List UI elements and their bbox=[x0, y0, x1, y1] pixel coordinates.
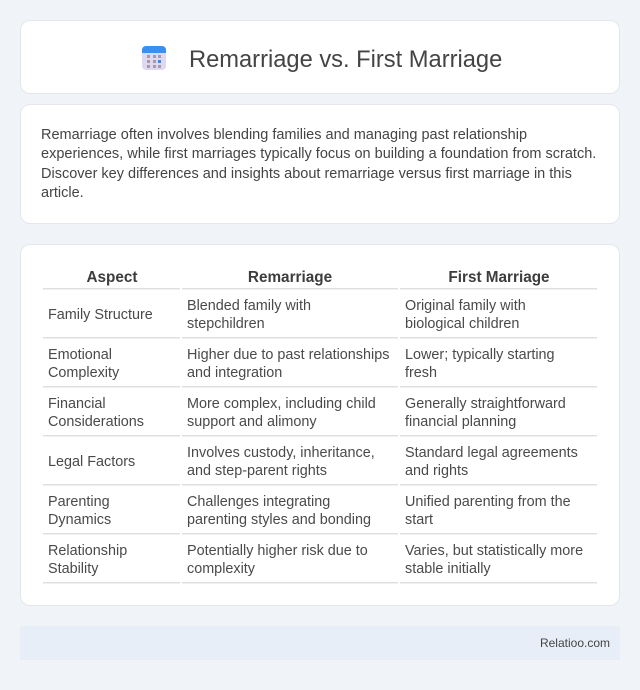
intro paragraph: Remarriage often involves blending families and managing past relationship bbox=[41, 127, 527, 143]
table header: Remarriage bbox=[248, 269, 332, 286]
row: family structure: Blended family with bbox=[187, 298, 311, 314]
row: parenting dynamics: Challenges integrating bbox=[187, 494, 330, 510]
row: legal factors: and step-parent rights bbox=[187, 463, 327, 479]
row: financial considerations: financial planning bbox=[405, 414, 516, 430]
row: emotional complexity: and integration bbox=[187, 365, 282, 381]
row: emotional complexity bbox=[43, 337, 597, 381]
footer bar bbox=[20, 626, 620, 660]
row: family structure: stepchildren bbox=[187, 316, 265, 332]
row: financial considerations: support and alimony bbox=[187, 414, 317, 430]
row: family structure: Family Structure bbox=[48, 307, 153, 323]
footer brand text: Relatioo.com bbox=[540, 636, 610, 650]
row: legal factors: Legal Factors bbox=[48, 454, 135, 470]
title: Remarriage vs. First Marriage bbox=[189, 47, 502, 73]
row: financial considerations bbox=[43, 386, 597, 430]
row: family structure bbox=[43, 288, 597, 332]
row: parenting dynamics: Parenting bbox=[48, 494, 110, 510]
row: emotional complexity: Emotional bbox=[48, 347, 112, 363]
row: relationship stability: Stability bbox=[48, 561, 98, 577]
row: legal factors bbox=[43, 435, 597, 479]
row: financial considerations: More complex, including child bbox=[187, 396, 376, 412]
row: financial considerations: Financial bbox=[48, 396, 106, 412]
table header bbox=[86, 269, 550, 286]
row: legal factors: Standard legal agreements bbox=[405, 445, 578, 461]
intro paragraph: Discover key differences and insights about remarriage versus first marriage in this bbox=[41, 166, 572, 182]
intro paragraph bbox=[41, 127, 596, 201]
row: family structure: biological children bbox=[405, 316, 519, 332]
row: relationship stability: Varies, but statistically more bbox=[405, 543, 583, 559]
row: relationship stability: stable initially bbox=[405, 561, 491, 577]
row: relationship stability: Potentially higher risk due to bbox=[187, 543, 368, 559]
table header: Aspect bbox=[86, 269, 138, 286]
panel: intro text bbox=[20, 104, 620, 224]
table header: First Marriage bbox=[448, 269, 550, 286]
panel: comparison table bbox=[20, 244, 620, 606]
row: relationship stability: complexity bbox=[187, 561, 255, 577]
row: financial considerations: Considerations bbox=[48, 414, 144, 430]
row: parenting dynamics: Dynamics bbox=[48, 512, 111, 528]
row: emotional complexity: Lower; typically starting bbox=[405, 347, 555, 363]
row: legal factors: and rights bbox=[405, 463, 468, 479]
row: parenting dynamics: Unified parenting from the bbox=[405, 494, 571, 510]
icon: calendar bbox=[142, 46, 166, 70]
intro paragraph: experiences, while first marriages typically focus on building a foundation from scratch. bbox=[41, 146, 596, 162]
row: emotional complexity: fresh bbox=[405, 365, 437, 381]
row: relationship stability bbox=[43, 533, 597, 584]
intro paragraph: article. bbox=[41, 185, 84, 201]
row: relationship stability: Relationship bbox=[48, 543, 127, 559]
row: emotional complexity: Complexity bbox=[48, 365, 119, 381]
row: parenting dynamics: parenting styles and bonding bbox=[187, 512, 371, 528]
row: parenting dynamics bbox=[43, 484, 597, 528]
row: family structure: Original family with bbox=[405, 298, 526, 314]
row: emotional complexity: Higher due to past relationships bbox=[187, 347, 389, 363]
panel: title card bbox=[20, 20, 620, 94]
row: legal factors: Involves custody, inheritance, bbox=[187, 445, 375, 461]
row: parenting dynamics: start bbox=[405, 512, 433, 528]
row: financial considerations: Generally straightforward bbox=[405, 396, 566, 412]
